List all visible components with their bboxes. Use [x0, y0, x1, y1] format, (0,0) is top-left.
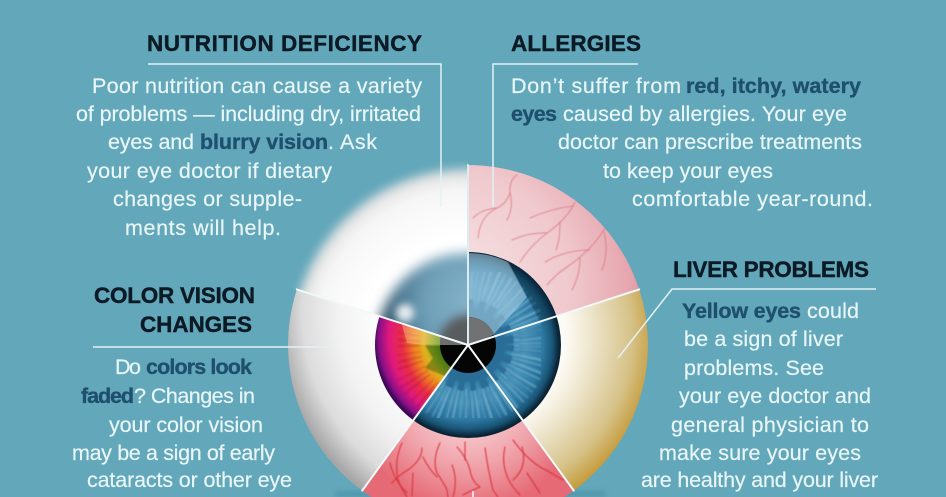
panel: liver problems	[618, 257, 878, 492]
heading: nutrition deficiency: NUTRITION DEFICIENCY	[147, 31, 422, 56]
callout line: liver problems	[618, 289, 876, 358]
text block: color vision: Do	[115, 355, 141, 379]
text block: liver problems: your eye doctor and	[679, 384, 871, 408]
text block: liver problems: are healthy and your liver	[641, 468, 878, 492]
text block: color vision: cataracts or other eye	[87, 468, 292, 492]
illustration: segmented eye	[288, 165, 648, 497]
text block: nutrition deficiency: your eye doctor if dietary	[87, 159, 332, 183]
wedge: nutrition deficiency, blurry vision	[294, 162, 468, 344]
text block: allergies: to keep your eyes	[603, 159, 773, 183]
text block: color vision: your color vision	[109, 413, 263, 437]
wedge: allergies, pink sclera with veins	[469, 165, 639, 344]
heading: color vision changes: COLOR VISION	[94, 283, 255, 308]
callout line: color vision	[93, 346, 328, 348]
text block: allergies: caused by allergies. Your eye	[563, 102, 847, 126]
text block: color vision: ? Changes in	[134, 384, 255, 408]
text block: nutrition deficiency: of problems — including dry, irritated	[76, 102, 421, 126]
wedge: color vision, rainbow iris	[288, 290, 466, 490]
rainbow iris highlight	[402, 325, 440, 346]
heading: color vision changes: CHANGES	[140, 312, 252, 337]
text block: liver problems: make sure your eyes	[659, 441, 861, 465]
text block: nutrition deficiency: eyes and	[108, 130, 194, 154]
iris shadow	[507, 262, 550, 320]
veins: bottom	[390, 440, 563, 497]
panel: allergies	[493, 31, 873, 211]
text block: nutrition deficiency: blurry vision	[200, 130, 328, 154]
text block: allergies	[511, 74, 873, 211]
text block: allergies: comfortable year-round.	[632, 187, 873, 211]
text block: allergies: doctor can prescribe treatments	[558, 130, 862, 154]
heading: allergies: ALLERGIES	[511, 31, 641, 56]
panel: nutrition deficiency	[76, 31, 441, 240]
text block: liver problems: could	[807, 299, 859, 323]
wedge: liver problems, yellow sclera	[470, 290, 648, 490]
callout line: nutrition deficiency	[148, 64, 441, 207]
callout line: allergies	[493, 64, 638, 207]
text block: nutrition deficiency: changes or supple-	[113, 187, 302, 211]
wedge: bottom, red sclera with veins	[363, 346, 573, 497]
text block: liver problems: general physician to	[671, 413, 869, 437]
text block: liver problems: be a sign of liver	[684, 327, 843, 351]
text block: allergies: red, itchy, watery	[686, 74, 861, 98]
text block: nutrition deficiency: . Ask	[328, 130, 377, 154]
text block: nutrition deficiency	[76, 74, 422, 240]
text block: liver problems: Yellow eyes	[682, 299, 801, 323]
iris reflection	[469, 253, 527, 334]
text block: color vision: faded	[81, 384, 134, 408]
text block: allergies: Don’t suffer from	[511, 74, 681, 98]
text block: nutrition deficiency: ments will help.	[125, 216, 281, 240]
heading: liver problems: LIVER PROBLEMS	[673, 257, 869, 282]
text block: color vision: may be a sign of early	[72, 441, 275, 465]
callout line: bottom panel stub	[472, 491, 474, 497]
shadow under eye	[335, 491, 605, 497]
text block: color vision	[72, 355, 292, 492]
text block: liver problems: problems. See	[684, 356, 824, 380]
text block: allergies: eyes	[511, 102, 557, 126]
text block: color vision: colors look	[146, 355, 252, 379]
panel: color vision changes	[72, 283, 328, 492]
text block: liver problems	[641, 299, 878, 492]
heading: color vision changes	[94, 283, 255, 337]
spokes	[297, 165, 639, 491]
text block: nutrition deficiency: Poor nutrition can cause a variety	[92, 74, 422, 98]
veins: allergies	[473, 175, 606, 290]
